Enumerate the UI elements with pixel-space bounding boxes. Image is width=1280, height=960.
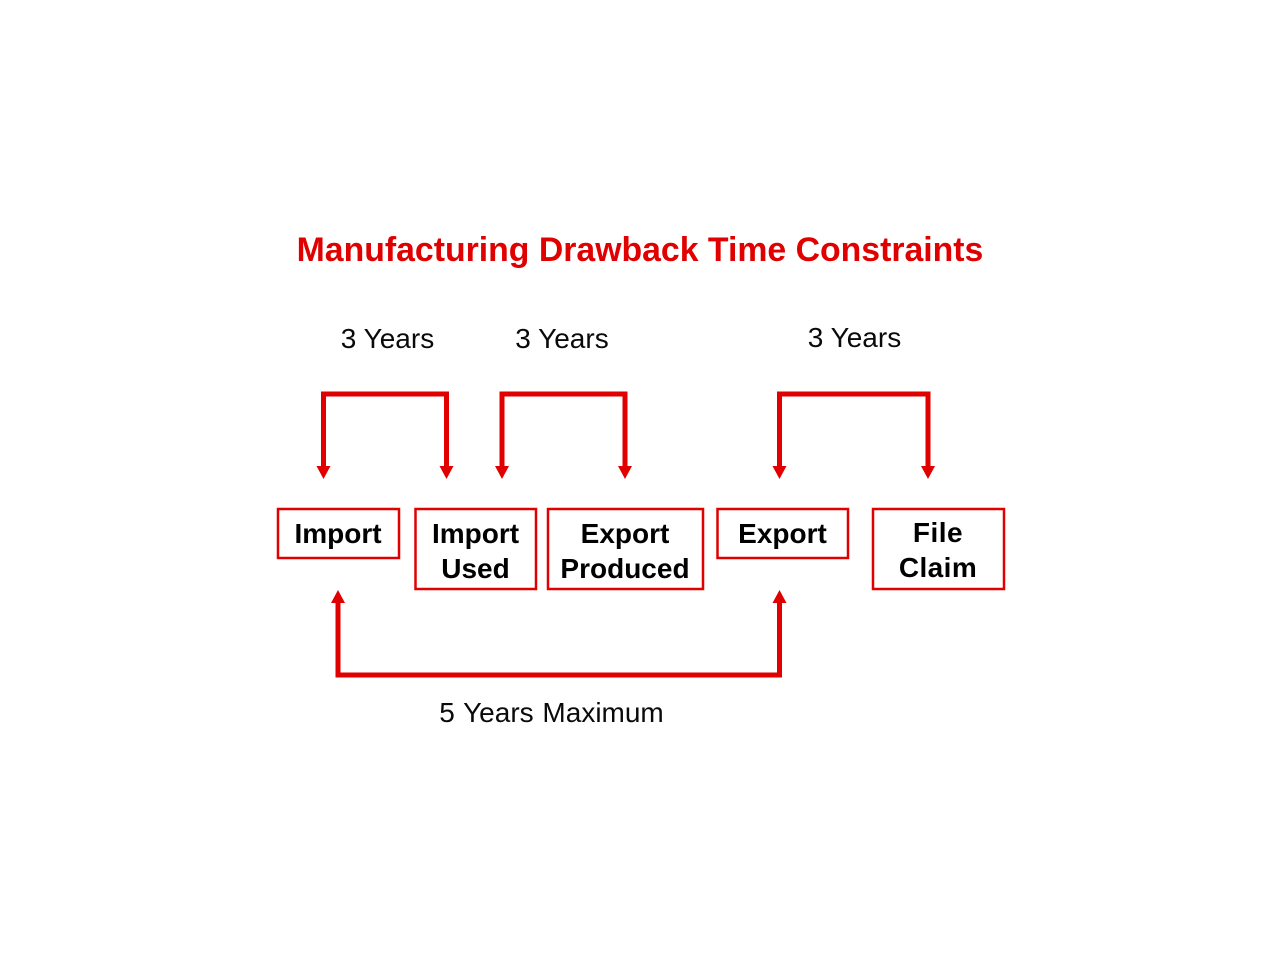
- arrow: import used to export produced: [495, 394, 632, 479]
- box: import: [278, 509, 399, 558]
- box: export: Export: [738, 518, 827, 549]
- box: import used: [416, 509, 536, 589]
- box: export: [718, 509, 848, 558]
- arrow: import to import used: [316, 394, 454, 479]
- box: import used: Import: [432, 518, 519, 549]
- label: 5 years maximum: 5 Years Maximum: [439, 697, 664, 728]
- label: 3 years import to import used: 3 Years: [341, 323, 434, 354]
- box: export produced: Produced: [560, 553, 690, 584]
- box: export produced: Export: [581, 518, 669, 549]
- box: import: Import: [294, 518, 382, 549]
- arrow: export to file claim: [772, 394, 935, 479]
- title: Manufacturing Drawback Time Constraints: [297, 231, 983, 269]
- box: export produced: [548, 509, 703, 589]
- box: file claim: File: [913, 517, 963, 548]
- label: 3 years export to file claim: 3 Years: [808, 322, 901, 353]
- arrow: import to export maximum: [331, 590, 786, 675]
- box: import used: Used: [441, 553, 510, 584]
- box: file claim: Claim: [899, 552, 977, 583]
- label: 3 years import used to export produced: 3 Years: [515, 323, 609, 354]
- box: file claim: [873, 509, 1004, 589]
